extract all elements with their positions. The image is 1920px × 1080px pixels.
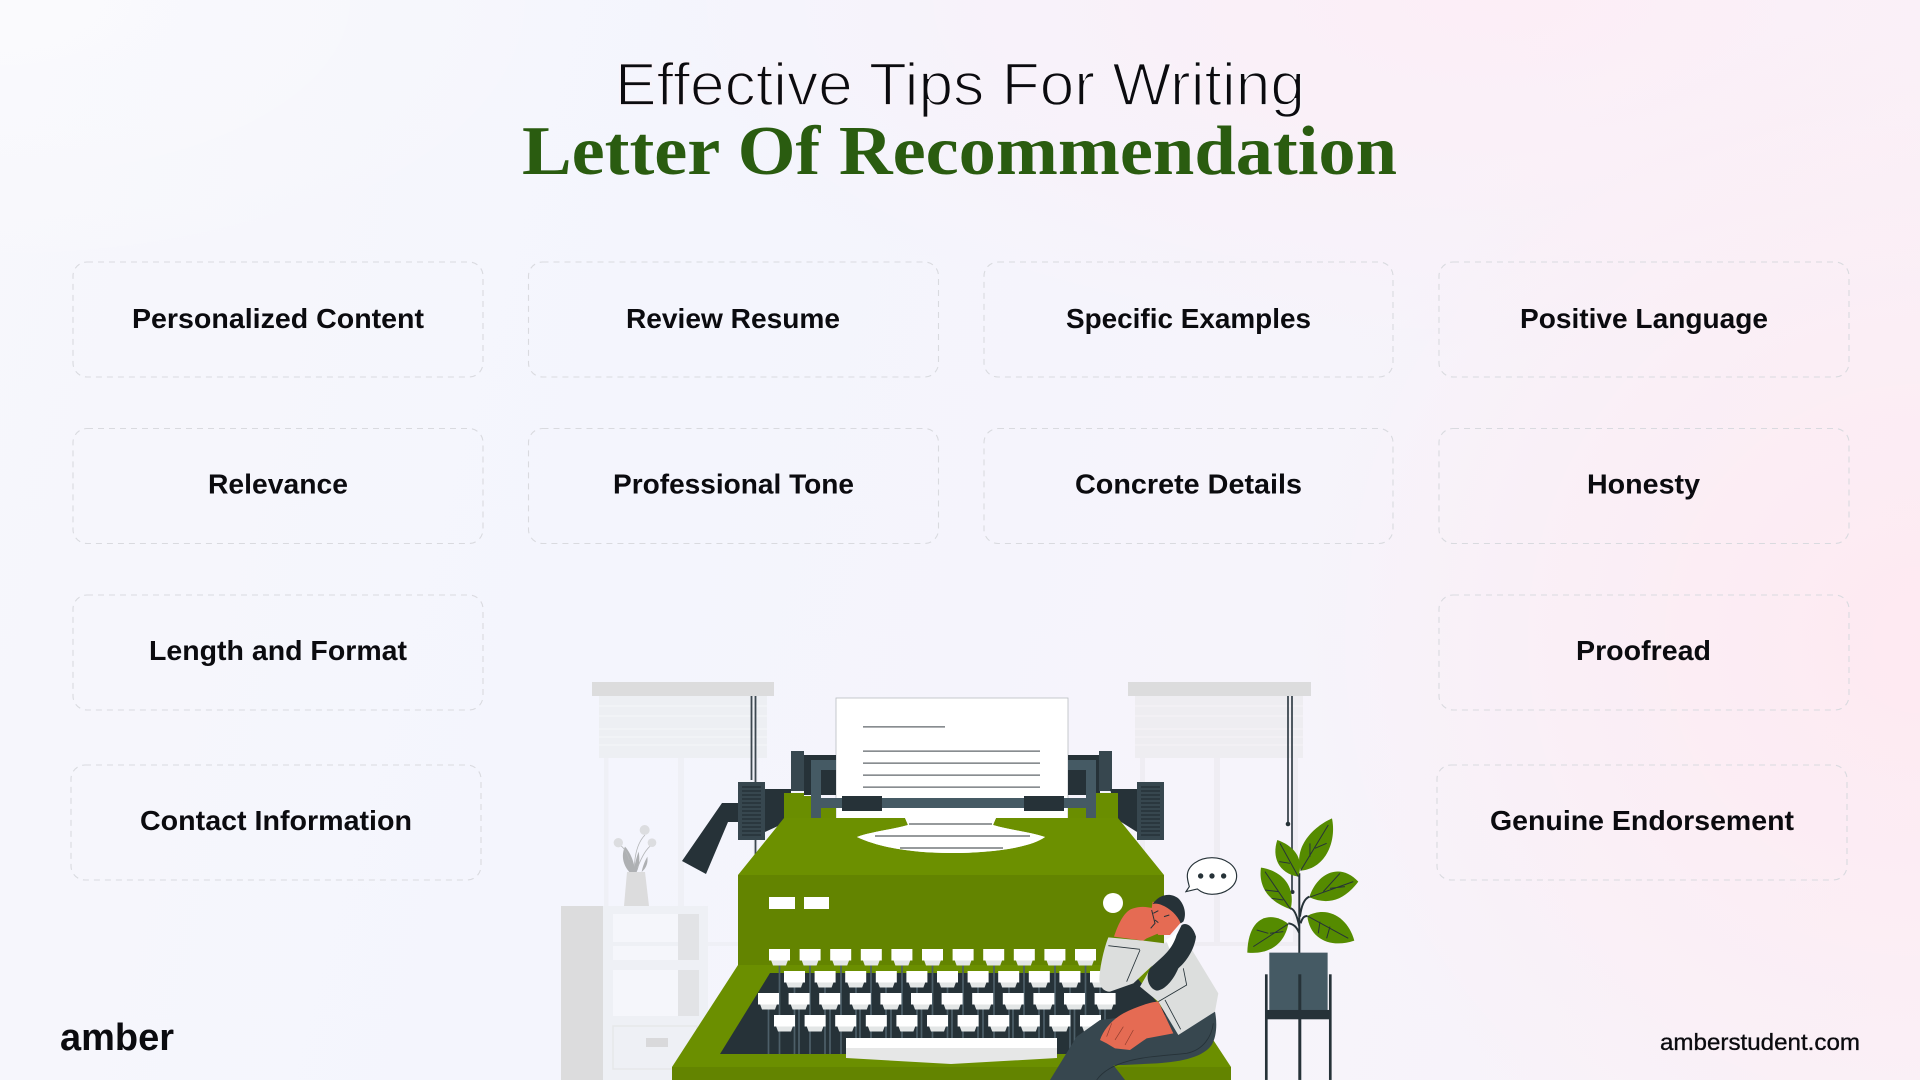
carriage bar — [811, 770, 1096, 818]
card: Contact Information: Contact Information — [140, 805, 412, 836]
card: Contact Information — [71, 765, 481, 880]
upper sleeve — [1099, 937, 1165, 992]
keyboard well — [720, 973, 1200, 1054]
card: Review Resume: Review Resume — [626, 303, 840, 334]
card: Review Resume — [528, 262, 938, 377]
collar — [1166, 930, 1183, 950]
illustration: background window right — [1128, 682, 1311, 946]
typewriter lever — [682, 803, 738, 874]
logo: amber: amber — [60, 1017, 174, 1059]
illustration: typewriter — [672, 698, 1231, 1080]
knob right — [1137, 782, 1164, 840]
title: Effective Tips For Writing — [615, 51, 1305, 118]
card: Genuine Endorsement — [1437, 765, 1847, 880]
key stems — [768, 965, 1105, 1054]
card: Positive Language — [1439, 262, 1849, 377]
ponytail — [1148, 924, 1196, 991]
card: Personalized Content: Personalized Content — [132, 303, 424, 334]
card: Genuine Endorsement: Genuine Endorsement — [1490, 805, 1794, 836]
title — [522, 51, 1397, 190]
card: Specific Examples — [984, 262, 1393, 377]
card: Length and Format — [73, 595, 483, 710]
title: Letter Of Recommendation — [522, 113, 1397, 190]
card: Honesty: Honesty — [1587, 468, 1700, 500]
card: Professional Tone — [528, 428, 938, 544]
illustration: shelf with vase — [561, 825, 708, 1080]
illustration: background window left — [592, 682, 774, 946]
hand on chin — [1114, 907, 1158, 941]
card: Specific Examples: Specific Examples — [1066, 303, 1311, 334]
typewriter top green block — [784, 793, 1118, 820]
spacebar — [846, 1038, 1057, 1064]
hair — [1153, 895, 1185, 923]
card: Length and Format: Length and Format — [149, 635, 407, 666]
illustration: plant on stand — [1247, 818, 1358, 1080]
jacket torso — [1140, 937, 1218, 1035]
card: Relevance: Relevance — [208, 468, 348, 500]
typewriter display buttons — [769, 897, 829, 909]
illustration: thinking woman — [1050, 895, 1218, 1080]
card: Honesty — [1439, 428, 1849, 544]
website link: amberstudent.com — [1660, 1029, 1860, 1055]
illustration: speech bubble — [1186, 858, 1237, 894]
carriage left — [765, 751, 836, 832]
card: Concrete Details — [984, 428, 1393, 544]
trousers — [1050, 1012, 1216, 1080]
face — [1150, 902, 1182, 935]
card: Positive Language: Positive Language — [1520, 303, 1768, 334]
carriage right — [1068, 751, 1137, 832]
knob left — [738, 782, 765, 840]
card: Relevance — [73, 428, 483, 544]
card: Professional Tone: Professional Tone — [613, 468, 854, 500]
card: Personalized Content — [73, 262, 483, 377]
card: Proofread — [1439, 595, 1849, 710]
card: Proofread: Proofread — [1576, 635, 1711, 666]
typewriter round button — [1103, 893, 1123, 913]
card: Concrete Details: Concrete Details — [1075, 468, 1302, 500]
typewriter paper — [836, 698, 1068, 820]
face details — [1151, 910, 1169, 928]
hand on knee — [1100, 1002, 1173, 1050]
keys — [758, 949, 1116, 1032]
typewriter body — [672, 818, 1231, 1080]
